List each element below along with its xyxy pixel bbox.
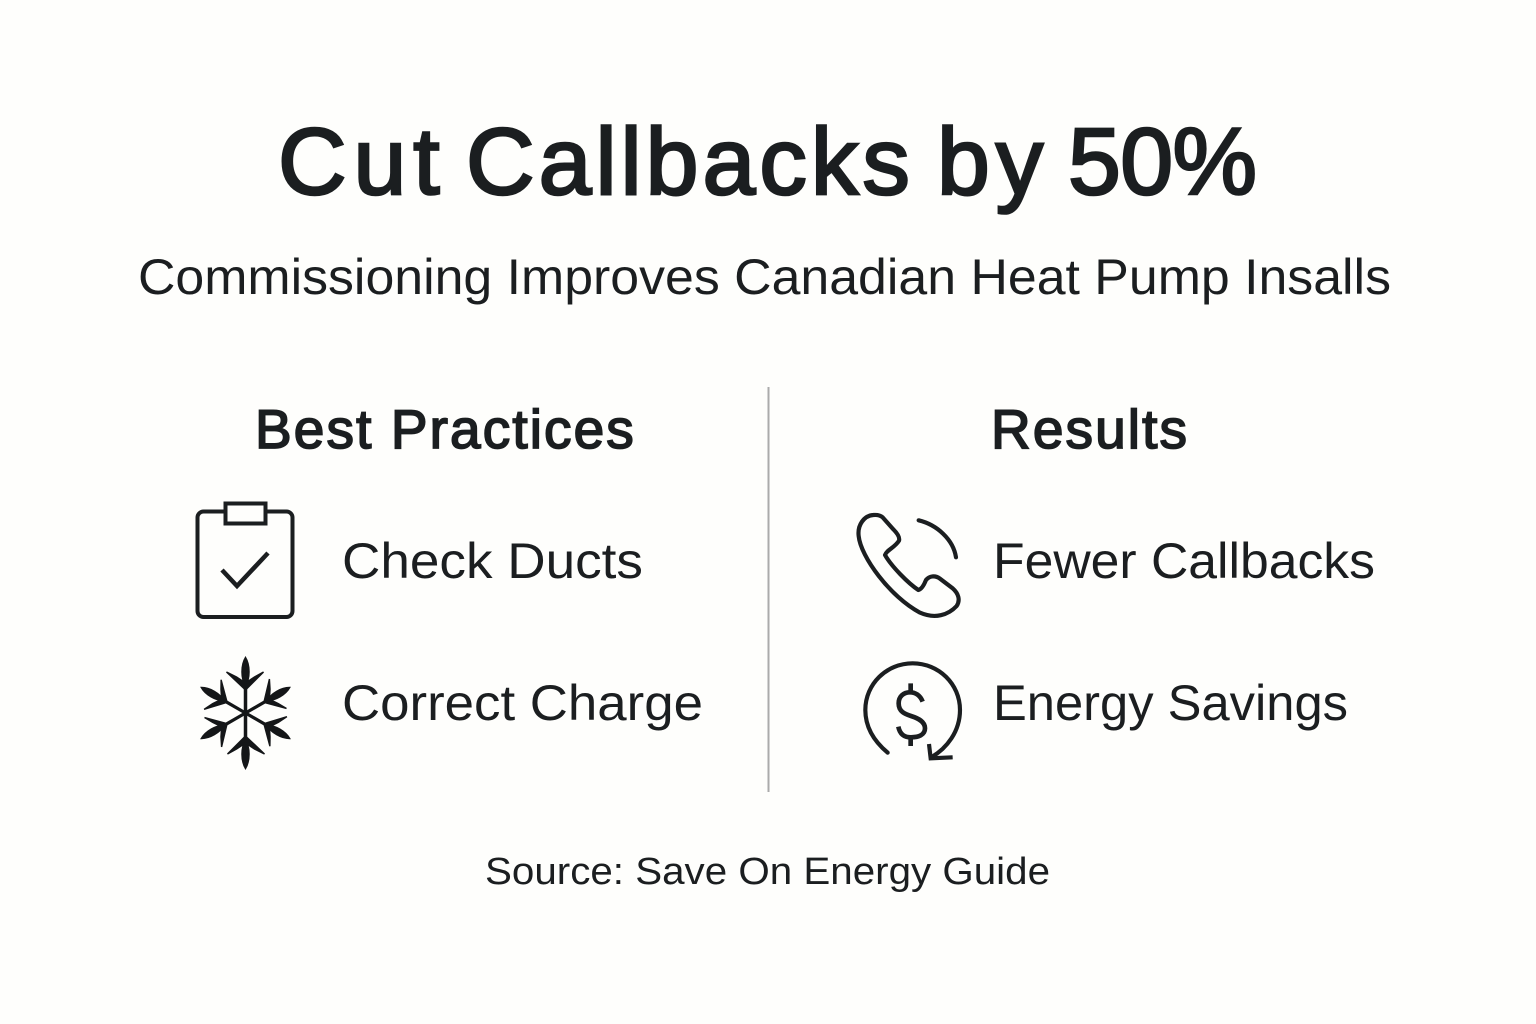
icon: snowflake <box>192 657 299 769</box>
title: Cut <box>278 109 447 215</box>
title: Callbacks <box>466 109 914 215</box>
heading: best practices: Best Practices <box>255 398 636 460</box>
icon: phone handset with signal arc <box>858 515 959 616</box>
source note: Source: Save On Energy Guide <box>485 851 1050 893</box>
title: 50% <box>1068 109 1256 215</box>
label: check ducts: Check Ducts <box>342 533 643 589</box>
title: by <box>937 109 1049 215</box>
divider <box>768 387 770 792</box>
label: correct charge: Correct Charge <box>342 675 703 731</box>
label: energy savings: Energy Savings <box>993 675 1348 731</box>
panel: best practices <box>192 398 703 769</box>
icon: clipboard with check <box>198 504 292 617</box>
icon: dollar with circular arrow <box>865 663 960 758</box>
heading: results: Results <box>991 398 1189 460</box>
panel: results <box>858 398 1375 758</box>
subtitle: Commissioning Improves Canadian Heat Pump Insalls <box>138 249 1391 305</box>
label: fewer callbacks: Fewer Callbacks <box>993 533 1375 589</box>
